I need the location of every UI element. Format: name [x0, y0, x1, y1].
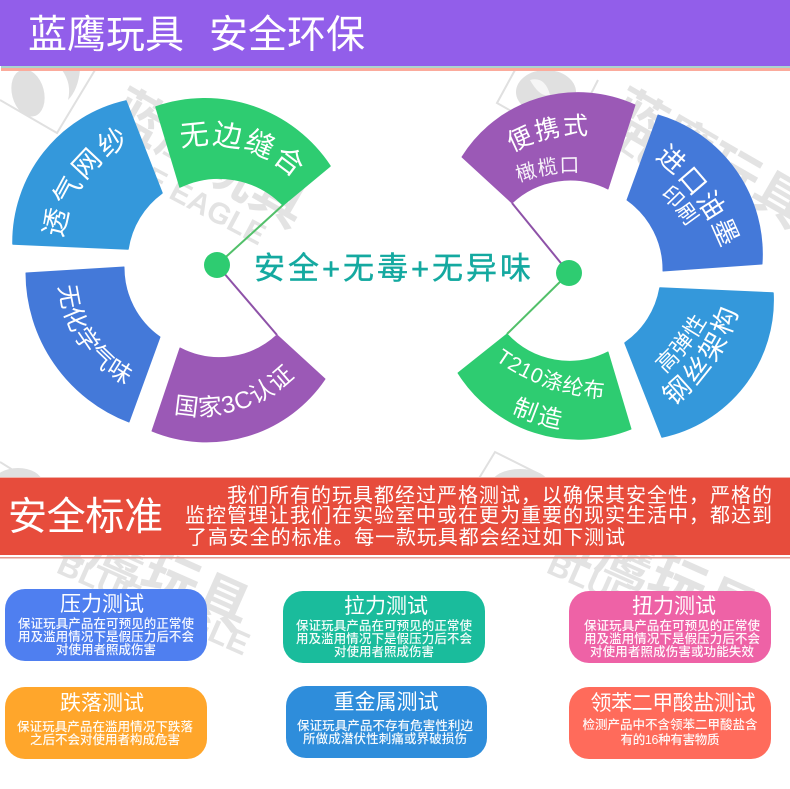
band description: 我们所有的玩具都经过严格测试，以确保其安全性，严格的 [227, 484, 772, 507]
segment: 无边缝合 [155, 98, 331, 206]
card: 拉力测试: 对使用者照成伤害 [334, 644, 434, 659]
segment: 进口油墨印刷: 进口油墨 [656, 143, 740, 248]
card: 领苯二甲酸盐测试: 有的16种有害物质 [620, 732, 720, 747]
card: 扭力测试: 对使用者照成伤害或功能失效 [590, 644, 754, 659]
segment: 无化学气味: 无化学气味 [57, 285, 132, 384]
card: 重金属测试: 保证玩具产品不存有危害性利边 [297, 718, 473, 733]
watermark: brand logos and text: 蓝鹰玩具 [537, 497, 767, 646]
segment: 进口油墨印刷: 印刷 [662, 185, 700, 226]
header banner: 蓝鹰玩具 [28, 14, 184, 57]
segment: 透气网纱: 透气网纱 [40, 127, 123, 238]
card: 跌落测试: 跌落测试 [60, 692, 144, 715]
segment: 高弹性钢丝架构: 高弹性 [654, 314, 708, 374]
center slogan: 安全+无毒+无异味 [254, 251, 531, 286]
card: 重金属测试: 重金属测试 [334, 691, 438, 714]
watermark: brand logos and text: BLUE EAGLE [52, 546, 255, 662]
card: 压力测试: 保证玩具产品在可预见的正常使 [18, 616, 194, 631]
card: 重金属测试: 所做成潜伏性刺痛或界破损伤 [303, 731, 467, 746]
segment: 高弹性钢丝架构: 钢丝架构 [662, 306, 738, 405]
segment: 无边缝合: 无边缝合 [180, 120, 302, 176]
segment: 国家3C认证 [152, 334, 326, 442]
safety standard band [0, 477, 790, 558]
left connector lines [217, 205, 283, 335]
segment: T210涤纶布制造 [458, 334, 632, 440]
left hub dot [204, 252, 230, 278]
card: 压力测试: 压力测试 [60, 593, 144, 616]
right connector lines [507, 203, 569, 334]
watermark: brand logos and text: 蓝鹰玩具 [30, 493, 260, 642]
segment: 透气网纱 [12, 100, 163, 250]
header banner [0, 0, 790, 71]
watermark: brand logos and text [0, 66, 790, 662]
watermark: brand logos and text: 蓝鹰玩具 [100, 79, 317, 239]
segment: 高弹性钢丝架构 [624, 287, 774, 438]
card: 拉力测试: 拉力测试 [344, 595, 428, 618]
band description: 了高安全的标准。每一款玩具都会经过如下测试 [187, 526, 625, 549]
card: 压力测试 [5, 589, 207, 661]
segment: 进口油墨印刷 [626, 114, 763, 272]
segment: 便携式橄榄口: 便携式 [508, 114, 588, 152]
band heading: 安全标准 [8, 496, 163, 539]
segment: 便携式橄榄口: 橄榄口 [516, 156, 578, 182]
card: 压力测试: 用及滥用情况下是假压力后不会 [18, 629, 194, 644]
card: 扭力测试: 保证玩具产品在可预见的正常使 [584, 618, 760, 633]
band description: 监控管理让我们在实验室中或在更为重要的现实生活中，都达到 [185, 504, 772, 527]
watermark: brand logos and text: BLUE EAGLE [542, 546, 745, 662]
card: 扭力测试 [569, 591, 771, 663]
segment: T210涤纶布制造: 制造 [513, 396, 562, 430]
segment: 便携式橄榄口 [462, 92, 636, 204]
card: 跌落测试: 之后不会对使用者构成危害 [30, 732, 180, 747]
watermark: brand logos and text: BLUE [594, 111, 686, 191]
card: 拉力测试 [283, 591, 485, 663]
card: 扭力测试: 扭力测试 [632, 595, 716, 618]
right hub dot [556, 260, 582, 286]
card: 拉力测试: 用及滥用情况下是假压力后不会 [296, 631, 472, 646]
band description [185, 484, 772, 549]
card: 扭力测试: 用及滥用情况下是假压力后不会 [584, 631, 760, 646]
card: 拉力测试: 保证玩具产品在可预见的正常使 [296, 618, 472, 633]
card: 领苯二甲酸盐测试: 领苯二甲酸盐测试 [590, 692, 756, 715]
card: 跌落测试: 保证玩具产品在滥用情况下跌落 [17, 719, 193, 734]
card: 领苯二甲酸盐测试 [569, 687, 771, 759]
card: 重金属测试 [286, 686, 487, 758]
segment: 无化学气味 [26, 266, 160, 422]
header banner: 安全环保 [209, 14, 365, 57]
watermark: brand logos and text: BLUE EAGLE [85, 132, 271, 252]
card: 领苯二甲酸盐测试: 检测产品中不含领苯二甲酸盐含 [582, 717, 758, 732]
card: 跌落测试 [5, 687, 207, 759]
segment: T210涤纶布制造: T210涤纶布 [499, 348, 604, 399]
card: 压力测试: 对使用者照成伤害 [56, 642, 156, 657]
segment: 国家3C认证: 国家3C认证 [175, 364, 295, 418]
